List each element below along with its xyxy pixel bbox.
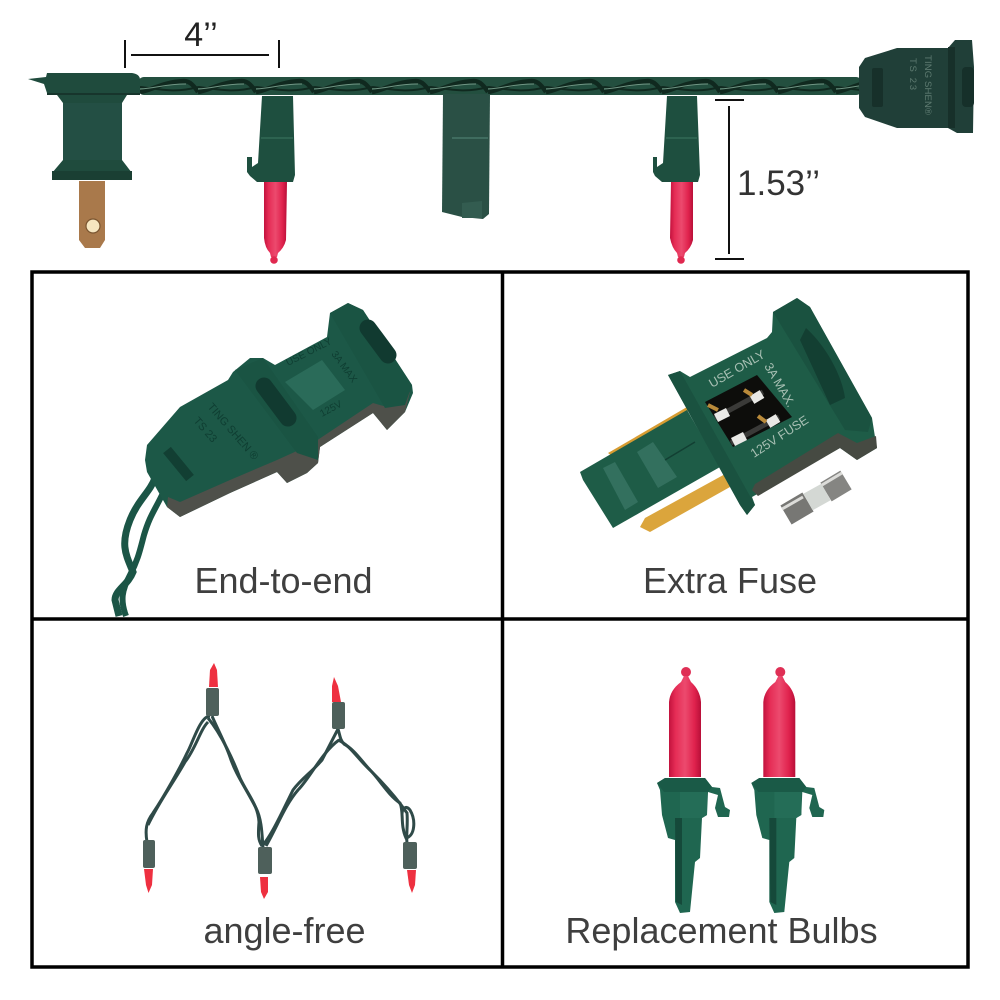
panel: extra fuse xyxy=(580,298,877,601)
male plug xyxy=(28,73,140,248)
loose fuse xyxy=(782,473,846,515)
label: angle-free xyxy=(203,910,366,951)
dimension: 4 inch xyxy=(125,16,279,68)
product strip: wire with plug, bulbs and socket xyxy=(28,40,974,264)
panel: angle-free xyxy=(143,663,417,951)
fuse plug illustration: 3A MAX. xyxy=(761,360,798,410)
dimension: 4 inch: 4’’ xyxy=(184,16,218,54)
fuse plug illustration xyxy=(580,298,877,532)
connector illustration xyxy=(115,303,413,616)
label: Replacement Bulbs xyxy=(565,910,878,951)
connector illustration: TS 23 xyxy=(191,415,219,445)
connector illustration: TING SHEN ® xyxy=(205,401,260,463)
clip xyxy=(442,94,490,219)
connector illustration: 125V xyxy=(318,399,344,420)
label: Extra Fuse xyxy=(643,560,817,601)
dimension: 1.53 inch xyxy=(715,100,820,259)
bulb 1 xyxy=(247,96,295,264)
label: End-to-end xyxy=(194,560,373,601)
bulb 2 xyxy=(653,96,700,264)
fuse plug illustration: 125V FUSE xyxy=(748,413,811,461)
female socket xyxy=(859,40,974,133)
connector illustration: 3A MAX xyxy=(329,349,359,385)
panel: replacement bulbs xyxy=(565,667,878,951)
twisted wire xyxy=(138,77,862,95)
bulb 1 xyxy=(657,667,730,913)
dimension: 1.53 inch: 1.53’’ xyxy=(737,164,820,203)
female socket: TS 23 xyxy=(907,58,918,90)
fuse plug illustration: USE ONLY xyxy=(706,347,768,391)
light string illustration xyxy=(143,663,417,899)
panel frame grid xyxy=(32,272,968,967)
connector illustration: USE ONLY xyxy=(284,336,334,369)
female socket: TING SHEN® xyxy=(922,55,933,115)
bulb 2 xyxy=(751,667,824,913)
panel: end-to-end xyxy=(115,303,413,616)
